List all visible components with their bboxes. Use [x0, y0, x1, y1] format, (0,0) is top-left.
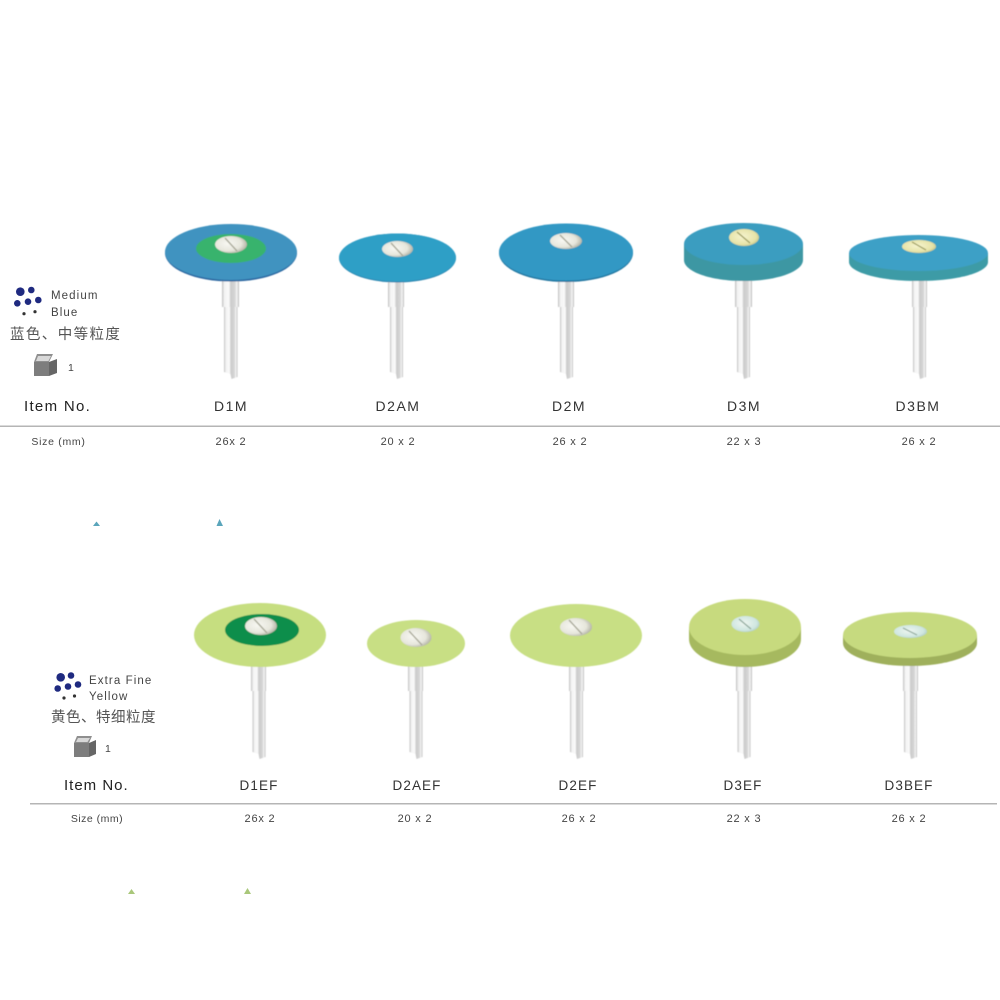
sizes: 26x 2: [245, 813, 275, 825]
sizes: [245, 813, 926, 825]
sizes: [216, 436, 936, 448]
pack quantity: 1: [105, 743, 111, 755]
sizes: 22 x 3: [727, 436, 761, 448]
bur D2EF: [510, 604, 642, 759]
bur D2M: [499, 224, 633, 379]
legend: extra fine yellow: [51, 672, 156, 757]
sizes: 22 x 3: [727, 813, 761, 825]
sizes: 26 x 2: [892, 813, 926, 825]
table: medium blue: [0, 398, 1000, 448]
item numbers: [214, 398, 940, 414]
bur D3M: [684, 223, 803, 379]
size heading: Size (mm): [71, 813, 123, 825]
sizes: 20 x 2: [398, 813, 432, 825]
legend: medium blue: [10, 287, 121, 376]
pack quantity: 1: [68, 362, 74, 374]
blue markers: [93, 519, 223, 526]
chinese label: 黄色、特细粒度: [51, 709, 156, 726]
bur D2AM: [339, 234, 456, 379]
bur D3EF: [689, 599, 801, 759]
sizes: 20 x 2: [381, 436, 415, 448]
item numbers: D3BM: [896, 398, 940, 414]
sizes: 26x 2: [216, 436, 246, 448]
icon: box: [74, 736, 96, 757]
item numbers: D2AM: [376, 398, 420, 414]
item numbers: D2EF: [559, 778, 597, 793]
legend colour: Yellow: [89, 691, 128, 703]
item numbers: D3M: [727, 398, 761, 414]
item numbers: D2M: [552, 398, 586, 414]
legend colour: Blue: [51, 307, 78, 319]
bur D3BEF: [843, 612, 977, 759]
sizes: 26 x 2: [562, 813, 596, 825]
bur D1EF: [194, 603, 326, 759]
yellow markers: [128, 888, 251, 894]
icon: grit dots: [14, 287, 42, 315]
item numbers: D3EF: [724, 778, 762, 793]
row heading: Item No.: [64, 777, 129, 794]
sizes: 26 x 2: [902, 436, 936, 448]
row heading: Item No.: [24, 398, 91, 415]
bur D2AEF: [367, 620, 465, 759]
chinese label: 蓝色、中等粒度: [10, 325, 121, 343]
icon: box: [34, 354, 57, 376]
bur D1M: [165, 224, 297, 379]
item numbers: D3BEF: [884, 778, 934, 793]
size heading: Size (mm): [31, 436, 86, 448]
icon: grit dots: [54, 672, 81, 700]
legend text: Medium: [51, 290, 99, 302]
table: extra fine yellow: [30, 777, 997, 825]
item numbers: D2AEF: [392, 778, 442, 793]
sizes: 26 x 2: [553, 436, 587, 448]
item numbers: D1EF: [240, 778, 278, 793]
legend text: Extra Fine: [89, 675, 152, 687]
bur D3BM: [849, 235, 988, 379]
item numbers: D1M: [214, 398, 248, 414]
item numbers: [240, 778, 934, 793]
